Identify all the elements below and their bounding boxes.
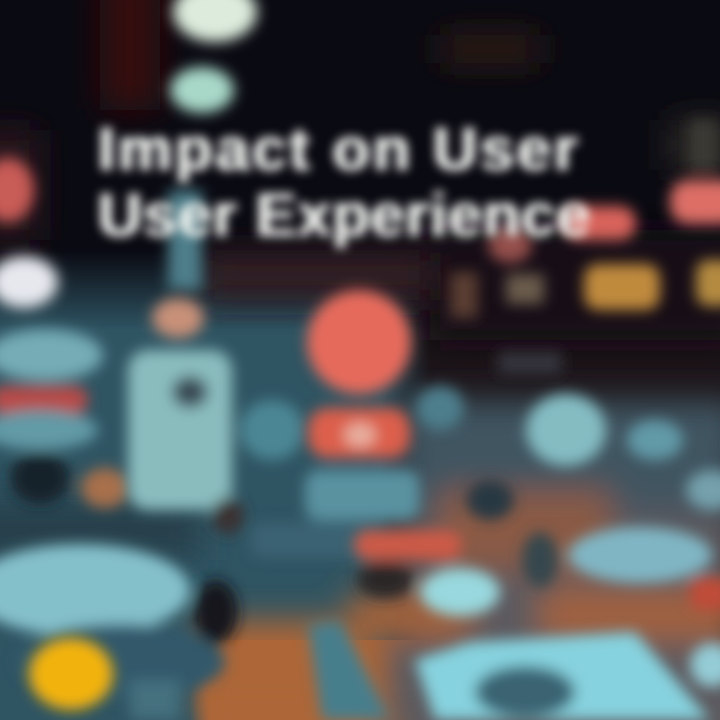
- central pale figure: [128, 298, 304, 534]
- red circular badge: [250, 290, 420, 558]
- bottom left bowl: [0, 544, 238, 720]
- right side dishes: [354, 386, 720, 616]
- title: [92, 116, 596, 256]
- left stacked figure: [0, 158, 129, 508]
- bottom right plate: [308, 620, 720, 720]
- icon: yellow coin: [29, 638, 113, 710]
- scene base colour: [0, 258, 720, 720]
- title: User Experience: [98, 181, 591, 248]
- title: Impact on User: [98, 116, 581, 183]
- lower scene base: [0, 230, 720, 720]
- dark upper backdrop: [0, 0, 720, 240]
- right side lamps: [450, 120, 720, 374]
- icon: pale circles at top: [168, 0, 257, 290]
